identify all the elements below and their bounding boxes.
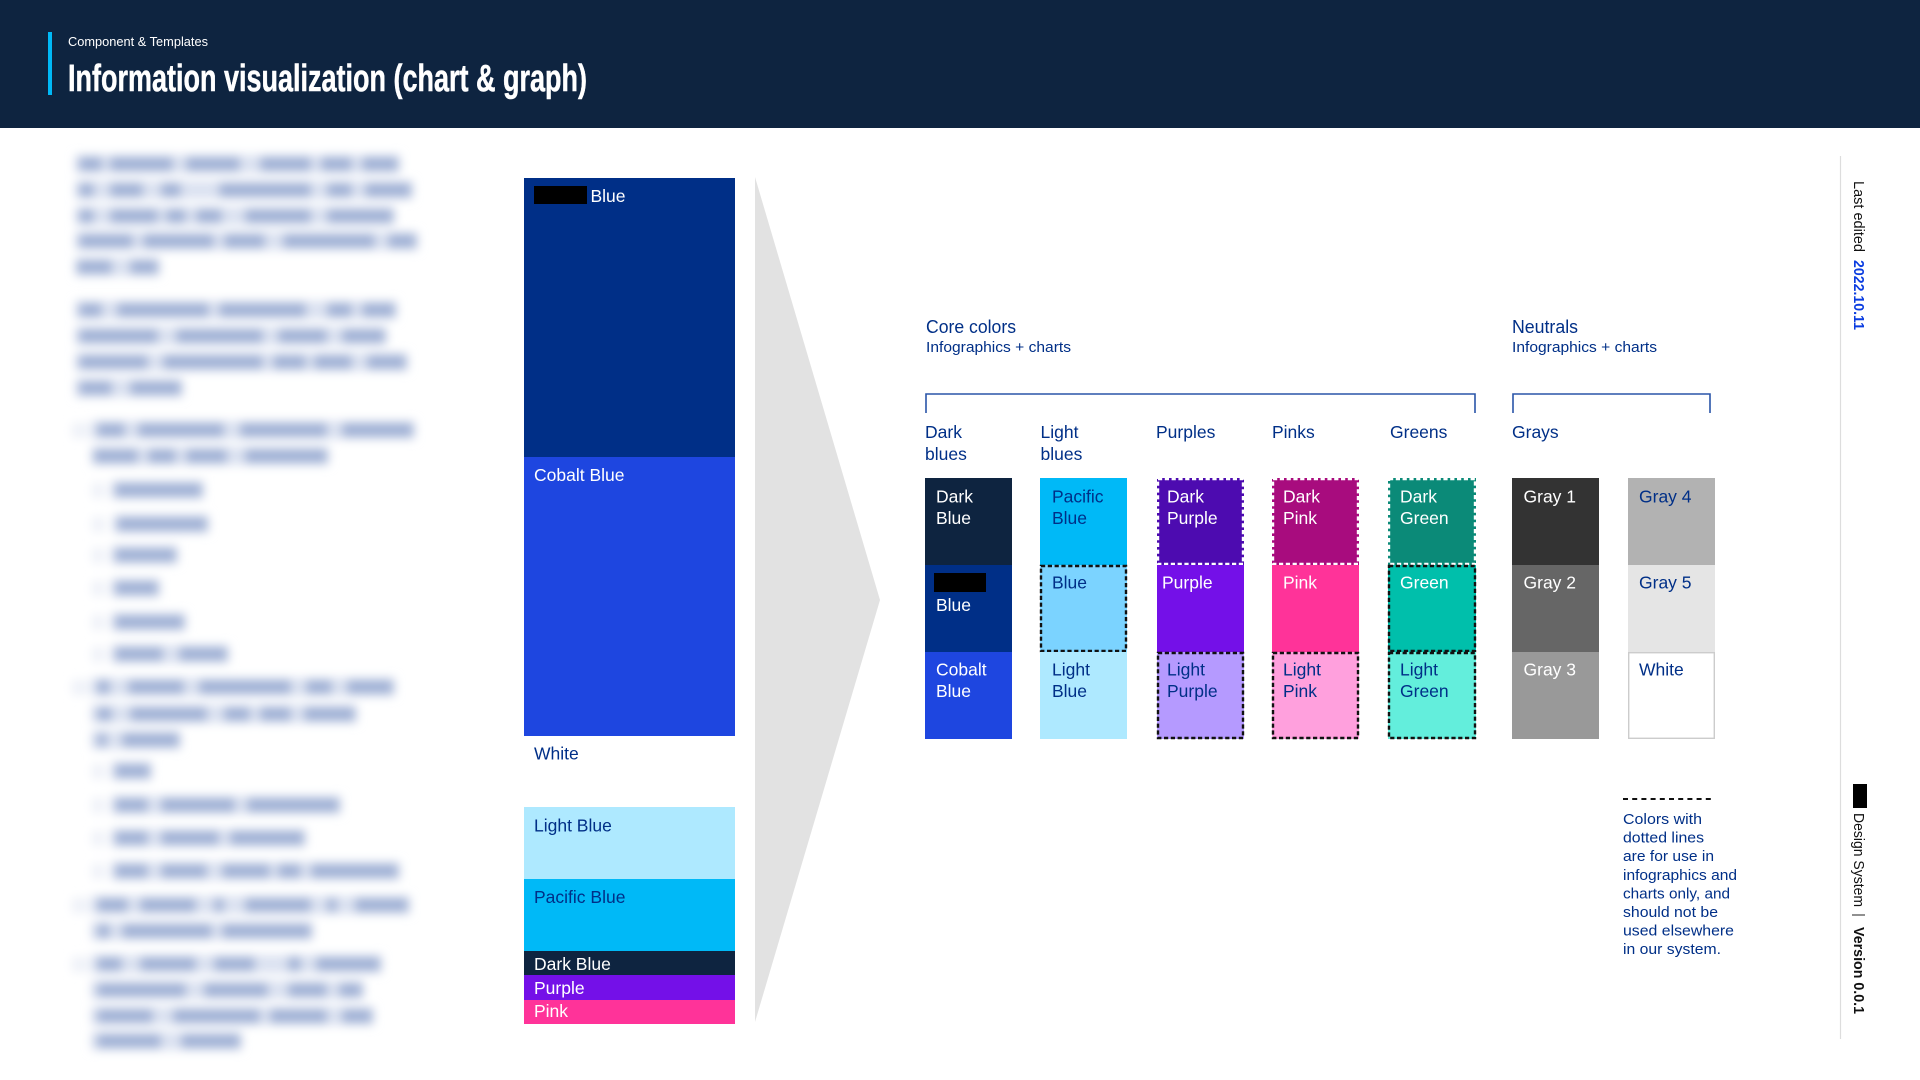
heading: neutrals bbox=[1512, 317, 1657, 356]
note text: Colors with bbox=[1623, 811, 1702, 828]
swatch: Dark Green bbox=[1388, 478, 1476, 565]
heading: core colors: Infographics + charts bbox=[926, 339, 1071, 356]
swatch: Pacific Blue bbox=[1040, 478, 1127, 565]
swatch: Gray 3 bbox=[1512, 652, 1599, 739]
swatch column: dark grays bbox=[1512, 478, 1599, 739]
title: Information visualization (chart & graph) bbox=[68, 58, 587, 100]
last edited: Last edited bbox=[1850, 181, 1866, 252]
edit date: 2022.10.11 bbox=[1850, 260, 1866, 330]
stack: White bbox=[524, 736, 735, 807]
legend dash sample bbox=[1623, 798, 1711, 800]
group labels: blues bbox=[1040, 444, 1083, 464]
stack: Purple bbox=[524, 975, 735, 1000]
stack: Purple: Purple bbox=[534, 978, 585, 998]
swatch: Cobalt Blue: Blue bbox=[936, 681, 971, 701]
blurred paragraph 2 bbox=[79, 303, 406, 395]
heading: neutrals: Neutrals bbox=[1512, 317, 1578, 337]
stack: Dark Blue bbox=[524, 951, 735, 975]
heading: core colors bbox=[926, 317, 1071, 356]
accent bar bbox=[48, 32, 52, 95]
swatch: Pink bbox=[1272, 565, 1359, 652]
breadcrumb: Component & Templates bbox=[68, 34, 208, 49]
group labels: Pinks bbox=[1272, 422, 1315, 442]
swatch: Cobalt Blue bbox=[925, 652, 1012, 739]
swatch: Dark Purple: Purple bbox=[1167, 508, 1218, 528]
stack: Pacific Blue: Pacific Blue bbox=[534, 887, 625, 907]
stack: Light Blue: Light Blue bbox=[534, 816, 612, 836]
swatch: Gray 2: Gray 2 bbox=[1524, 572, 1576, 592]
swatch: Light Blue: Blue bbox=[1052, 681, 1087, 701]
swatch: Dark Blue bbox=[925, 478, 1012, 565]
swatch: Pacific Blue: Pacific bbox=[1052, 486, 1104, 506]
swatch: Dark Pink: Dark bbox=[1283, 486, 1320, 506]
swatch: Cobalt Blue: Cobalt bbox=[936, 659, 987, 679]
swatch: Gray 2 bbox=[1512, 565, 1599, 652]
note text: should not be bbox=[1623, 904, 1718, 921]
group labels: Greens bbox=[1390, 422, 1448, 442]
swatch: Blue: Blue bbox=[936, 595, 971, 615]
design system: Design System bbox=[1850, 813, 1866, 907]
swatch: Light Pink: Light bbox=[1283, 659, 1321, 679]
stack: Blue: Blue bbox=[590, 186, 626, 206]
stack: Pacific Blue bbox=[524, 879, 735, 951]
version: Version 0.0.1 bbox=[1850, 927, 1866, 1014]
group labels: Dark bbox=[925, 422, 962, 442]
swatch: Dark Green: Dark bbox=[1400, 486, 1437, 506]
swatch: Light Blue bbox=[1040, 652, 1127, 739]
note text: charts only, and bbox=[1623, 885, 1730, 902]
swatch: Purple bbox=[1157, 565, 1244, 652]
note text: infographics and bbox=[1623, 867, 1737, 884]
swatch: Dark Blue: Blue bbox=[936, 508, 971, 528]
proportional colour stack bbox=[524, 178, 735, 1024]
swatch: Green bbox=[1388, 565, 1476, 652]
note text: in our system. bbox=[1623, 941, 1721, 958]
stack: Dark Blue: Dark Blue bbox=[534, 954, 611, 974]
swatch: Dark Purple: Dark bbox=[1167, 486, 1204, 506]
stack: Light Blue bbox=[524, 807, 735, 879]
swatch column: purples bbox=[1157, 478, 1244, 739]
group labels: Light bbox=[1040, 422, 1079, 442]
swatch column: pinks bbox=[1272, 478, 1359, 739]
bracket: neutrals bbox=[1513, 394, 1710, 413]
bracket: core colors bbox=[926, 394, 1475, 413]
swatch: Light Green bbox=[1388, 652, 1476, 739]
swatch: Gray 4: Gray 4 bbox=[1639, 486, 1692, 506]
swatch: White: White bbox=[1639, 659, 1684, 679]
pale halo under blurred lines bbox=[75, 155, 418, 1050]
swatch: Gray 5: Gray 5 bbox=[1639, 572, 1692, 592]
swatch: Gray 1: Gray 1 bbox=[1524, 486, 1576, 506]
swatch: Dark Blue: Dark bbox=[936, 486, 973, 506]
swatch: Pacific Blue: Blue bbox=[1052, 508, 1087, 528]
swatch: Purple: Purple bbox=[1162, 572, 1213, 592]
swatch: Dark Pink: Pink bbox=[1283, 508, 1317, 528]
swatch: Light Green: Light bbox=[1400, 659, 1438, 679]
note text: dotted lines bbox=[1623, 830, 1704, 847]
swatch: Light Purple bbox=[1157, 652, 1244, 739]
sidebar bbox=[1840, 156, 1867, 1039]
swatch: Light Green: Green bbox=[1400, 681, 1449, 701]
swatch column: light blues bbox=[1040, 478, 1127, 739]
swatch: Dark Green: Green bbox=[1400, 508, 1449, 528]
stack: White: White bbox=[534, 744, 579, 764]
swatch column: dark blues bbox=[925, 478, 1012, 739]
stack: Pink bbox=[524, 1000, 735, 1024]
swatch: Pink: Pink bbox=[1283, 572, 1317, 592]
note text: used elsewhere bbox=[1623, 923, 1734, 940]
swatch: Green: Green bbox=[1400, 572, 1449, 592]
blurred closing bullets bbox=[97, 898, 408, 1048]
swatch: Blue dotted: Blue bbox=[1052, 572, 1087, 592]
group labels: Grays bbox=[1512, 422, 1559, 442]
dotted legend note bbox=[1623, 799, 1737, 958]
group labels: blues bbox=[925, 444, 967, 464]
swatch: Light Purple: Light bbox=[1167, 659, 1205, 679]
blurred paragraph 1 bbox=[77, 157, 416, 274]
arrow: grey wedge bbox=[755, 177, 880, 1022]
stack: Blue bbox=[524, 178, 735, 457]
swatch column: light grays bbox=[1628, 478, 1715, 738]
swatch: Dark Pink bbox=[1272, 478, 1359, 565]
swatch: Gray 4 bbox=[1628, 478, 1715, 565]
stack: Cobalt Blue bbox=[524, 457, 735, 736]
blurred bullet list 1 bbox=[94, 423, 413, 661]
group labels: Purples bbox=[1156, 422, 1216, 442]
swatch: Light Pink bbox=[1272, 652, 1359, 739]
heading: neutrals: Infographics + charts bbox=[1512, 339, 1657, 356]
bullet markers bbox=[72, 423, 105, 972]
swatch: Blue dotted bbox=[1040, 565, 1127, 652]
swatch: Blue bbox=[925, 565, 1012, 652]
swatch: Light Purple: Purple bbox=[1167, 681, 1218, 701]
swatch: Light Blue: Light bbox=[1052, 659, 1090, 679]
note text bbox=[1623, 811, 1737, 958]
group labels bbox=[925, 422, 1559, 464]
swatch: White bbox=[1629, 653, 1714, 738]
redacted blurred description text bbox=[72, 155, 418, 1050]
swatch: Light Pink: Pink bbox=[1283, 681, 1317, 701]
note text: are for use in bbox=[1623, 848, 1714, 865]
swatch: Gray 3: Gray 3 bbox=[1524, 659, 1576, 679]
swatch: Gray 5 bbox=[1628, 565, 1715, 652]
swatch: Dark Purple bbox=[1157, 478, 1244, 565]
stack: Pink: Pink bbox=[534, 1001, 568, 1021]
stack: Cobalt Blue: Cobalt Blue bbox=[534, 465, 624, 485]
heading: core colors: Core colors bbox=[926, 317, 1016, 337]
blurred bullet list 2 bbox=[97, 680, 398, 878]
swatch: Gray 1 bbox=[1512, 478, 1599, 565]
redacted logo bbox=[1853, 784, 1867, 808]
swatch column: greens bbox=[1388, 478, 1476, 739]
header band bbox=[0, 0, 1920, 128]
